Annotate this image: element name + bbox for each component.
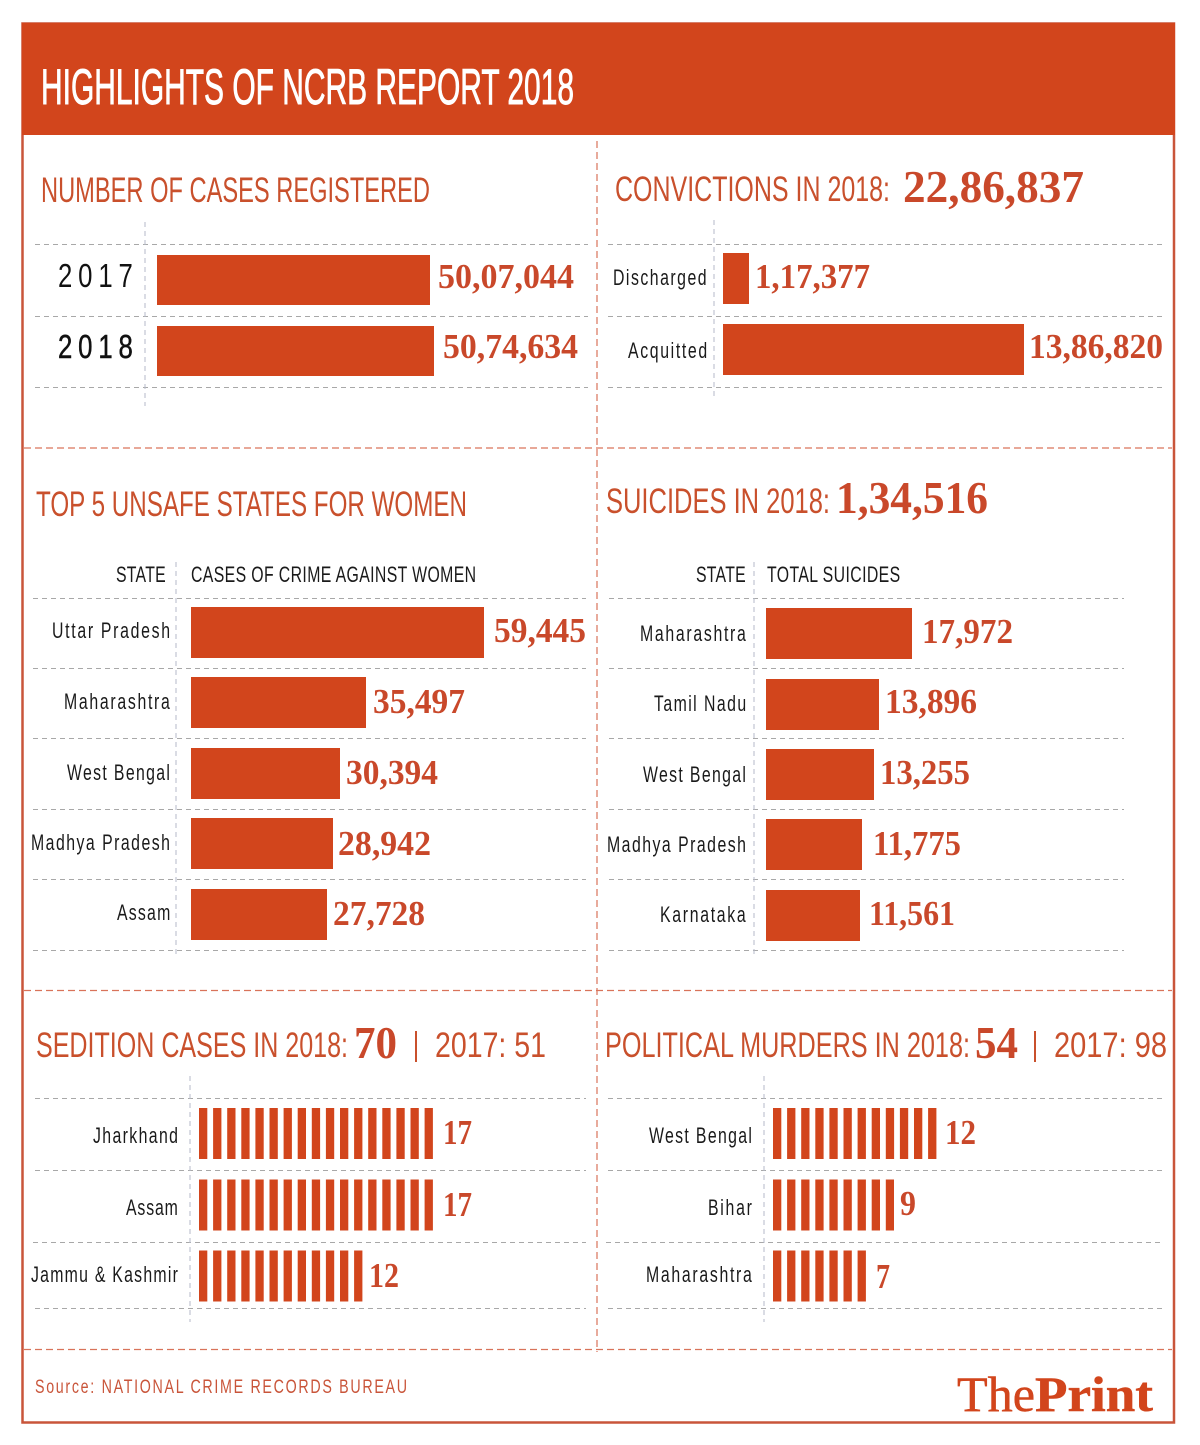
row: Jammu & Kashmir: 12 bbox=[369, 1256, 399, 1295]
row: discharged: 1,17,377 bbox=[755, 257, 870, 296]
heading: sedition cases: 2017: 51 bbox=[435, 1026, 546, 1065]
row: acquitted bbox=[628, 324, 1163, 375]
row: West Bengal: West Bengal bbox=[649, 1125, 752, 1149]
row: Uttar Pradesh: Uttar Pradesh bbox=[52, 620, 170, 644]
panel: number of cases registered bbox=[35, 171, 588, 406]
row: 2017: 50,07,044 bbox=[438, 257, 574, 296]
row: Madhya Pradesh bbox=[607, 819, 961, 870]
heading: convictions: CONVICTIONS IN 2018: bbox=[615, 170, 890, 209]
heading: suicides bbox=[606, 473, 988, 523]
row: West Bengal: 12 bbox=[945, 1113, 976, 1152]
logo: ThePrint bbox=[957, 1366, 1153, 1422]
heading: political murders: POLITICAL MURDERS IN 2018: bbox=[605, 1026, 970, 1065]
panel: sedition cases bbox=[31, 1018, 586, 1322]
row: Maharashtra: Maharashtra bbox=[640, 623, 746, 647]
heading: number of cases: NUMBER OF CASES REGISTERED bbox=[41, 171, 430, 210]
row: West Bengal: 30,394 bbox=[346, 753, 438, 792]
row: acquitted: Acquitted bbox=[628, 340, 707, 364]
panel: political murders bbox=[605, 1018, 1167, 1322]
row: Bihar bbox=[708, 1184, 916, 1223]
heading: convictions bbox=[615, 162, 1084, 212]
row: Uttar Pradesh bbox=[52, 607, 586, 658]
row: Maharashtra: 35,497 bbox=[373, 682, 465, 721]
row: Maharashtra bbox=[640, 608, 1013, 659]
source note: Source: NATIONAL CRIME RECORDS BUREAU bbox=[35, 1376, 407, 1398]
row: 2018 bbox=[58, 326, 578, 376]
heading: sedition cases bbox=[36, 1018, 546, 1068]
row: Karnataka: Karnataka bbox=[660, 904, 746, 928]
row: Assam: 17 bbox=[443, 1185, 472, 1224]
row: Madhya Pradesh bbox=[31, 818, 431, 869]
row: Maharashtra: Maharashtra bbox=[646, 1264, 752, 1288]
row: West Bengal bbox=[67, 748, 438, 799]
row: Maharashtra: 7 bbox=[876, 1257, 890, 1296]
row: Assam bbox=[126, 1185, 472, 1224]
heading: sedition cases: SEDITION CASES IN 2018: bbox=[36, 1026, 348, 1065]
row: acquitted: 13,86,820 bbox=[1029, 327, 1163, 366]
row: Assam: Assam bbox=[126, 1197, 178, 1221]
row: Karnataka bbox=[660, 890, 955, 941]
row: Jharkhand: 17 bbox=[443, 1113, 472, 1152]
column heading: cases: CASES OF CRIME AGAINST WOMEN bbox=[191, 564, 476, 588]
row: Madhya Pradesh: Madhya Pradesh bbox=[607, 834, 746, 858]
row: Maharashtra bbox=[64, 677, 465, 728]
row: Uttar Pradesh: 59,445 bbox=[494, 611, 586, 650]
row: Maharashtra: Maharashtra bbox=[64, 691, 170, 715]
row: 2018: 50,74,634 bbox=[443, 327, 578, 366]
logo: ThePrint: Print bbox=[1035, 1366, 1153, 1422]
row: Tamil Nadu: Tamil Nadu bbox=[654, 693, 746, 717]
column heading: state: STATE bbox=[696, 564, 746, 588]
heading: political murders: 54 bbox=[975, 1018, 1018, 1068]
row: Madhya Pradesh: 28,942 bbox=[338, 824, 431, 863]
logo: ThePrint: The bbox=[957, 1366, 1035, 1422]
title: HIGHLIGHTS OF NCRB REPORT 2018 bbox=[41, 59, 574, 115]
row: Madhya Pradesh: 11,775 bbox=[873, 824, 961, 863]
row: West Bengal bbox=[643, 749, 970, 800]
row: Assam: 27,728 bbox=[333, 894, 425, 933]
row: Bihar: 9 bbox=[900, 1184, 916, 1223]
heading: sedition cases: 70 bbox=[354, 1018, 397, 1068]
row: Jharkhand bbox=[93, 1113, 472, 1152]
row: Tamil Nadu: 13,896 bbox=[885, 682, 977, 721]
row: Jammu & Kashmir: Jammu & Kashmir bbox=[31, 1264, 178, 1288]
heading: suicides: 1,34,516 bbox=[836, 473, 988, 523]
panel: top 5 unsafe states for women bbox=[31, 485, 586, 956]
heading: unsafe states: TOP 5 UNSAFE STATES FOR WOMEN bbox=[36, 485, 467, 524]
row: Tamil Nadu bbox=[654, 679, 977, 730]
panel: convictions bbox=[608, 162, 1163, 400]
row: Jammu & Kashmir bbox=[31, 1256, 399, 1295]
header banner bbox=[22, 23, 1175, 135]
row: Bihar: Bihar bbox=[708, 1197, 752, 1221]
row: discharged: Discharged bbox=[613, 267, 707, 291]
row: West Bengal: West Bengal bbox=[643, 764, 746, 788]
row: West Bengal: West Bengal bbox=[67, 762, 170, 786]
row: Assam bbox=[117, 889, 425, 940]
row: West Bengal: 13,255 bbox=[880, 753, 970, 792]
row: discharged bbox=[613, 253, 870, 304]
heading: convictions: 22,86,837 bbox=[903, 162, 1084, 212]
row: Maharashtra: 17,972 bbox=[922, 612, 1013, 651]
row: Maharashtra bbox=[646, 1257, 890, 1296]
row: West Bengal bbox=[649, 1113, 976, 1152]
row: Assam: Assam bbox=[117, 902, 170, 926]
row: Madhya Pradesh: Madhya Pradesh bbox=[31, 832, 170, 856]
row: 2017: 2017 bbox=[58, 258, 133, 295]
column heading: total suicides: TOTAL SUICIDES bbox=[767, 564, 900, 588]
row: 2018: 2018 bbox=[58, 329, 133, 366]
row: 2017 bbox=[58, 255, 574, 305]
row: Jharkhand: Jharkhand bbox=[93, 1125, 178, 1149]
heading: political murders: 2017: 98 bbox=[1054, 1026, 1167, 1065]
column heading: state: STATE bbox=[116, 564, 166, 588]
heading: suicides: SUICIDES IN 2018: bbox=[606, 482, 830, 521]
row: Karnataka: 11,561 bbox=[869, 894, 955, 933]
panel: suicides bbox=[606, 473, 1124, 958]
